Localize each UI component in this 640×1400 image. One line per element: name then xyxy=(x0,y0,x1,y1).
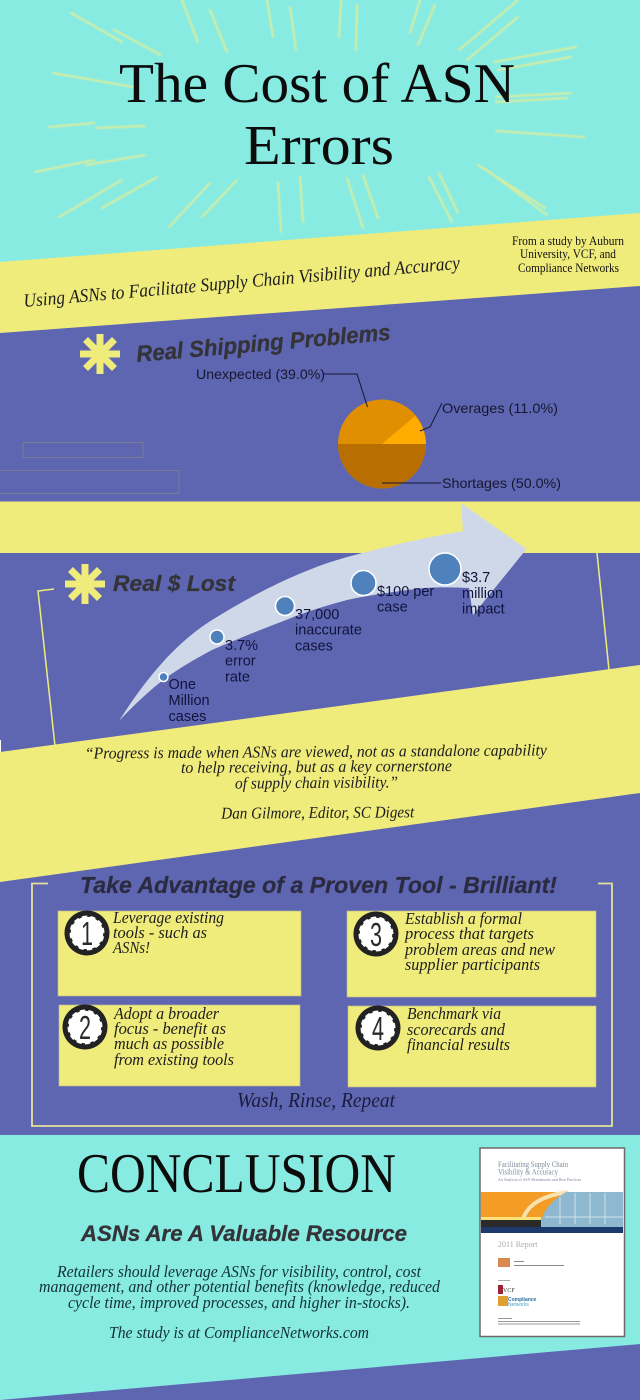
card 2 text: much as possible xyxy=(114,1034,224,1053)
icon: gear number 4 xyxy=(356,1006,400,1050)
card 3 xyxy=(347,909,596,997)
pie labels: Unexpected (39.0%) xyxy=(196,366,325,382)
card 4 text: Benchmark via xyxy=(407,1004,501,1023)
quote: Dan Gilmore, Editor, SC Digest xyxy=(220,802,415,823)
milestone labels: impact xyxy=(462,602,505,618)
icon: gear number 3: 3 xyxy=(370,916,382,953)
card 2 text: focus - benefit as xyxy=(114,1019,226,1038)
study link: The study is at ComplianceNetworks.com xyxy=(109,1323,369,1342)
leader lines xyxy=(324,374,442,483)
pie chart: shipping problems xyxy=(196,366,561,491)
milestone labels: One xyxy=(168,677,196,693)
conclusion paragraph: management, and other potential benefits (knowledge, reduced xyxy=(39,1277,441,1296)
cover logos xyxy=(498,1258,564,1308)
icon: gear number 1: 1 xyxy=(81,915,93,952)
conclusion paragraph: Retailers should leverage ASNs for visibility, control, cost xyxy=(56,1262,421,1281)
card 2 text: Adopt a broader xyxy=(113,1004,220,1023)
icon: gear number 4: 4 xyxy=(372,1010,384,1047)
arrow milestones xyxy=(159,553,461,682)
milestone labels xyxy=(168,570,505,725)
cover logos: VCF xyxy=(503,1288,515,1294)
icon: gear number 1 xyxy=(64,910,110,956)
card 1 text xyxy=(112,908,224,957)
study source note: Compliance Networks xyxy=(518,260,619,275)
quote: of supply chain visibility.” xyxy=(235,772,398,793)
milestone labels: 3.7% xyxy=(225,638,258,654)
quote: “Progress is made when ASNs are viewed, not as a standalone capability xyxy=(85,740,548,763)
study source note: From a study by Auburn xyxy=(512,233,624,248)
milestone labels: million xyxy=(462,586,503,602)
heading: real shipping problems: Real Shipping Problems xyxy=(135,319,391,367)
milestone labels: cases xyxy=(295,638,333,654)
milestone labels: inaccurate xyxy=(295,622,362,638)
progress arrow xyxy=(119,503,526,721)
empty outlined boxes xyxy=(0,442,179,494)
card 3 text: supplier participants xyxy=(405,955,540,974)
title xyxy=(119,53,515,177)
card 3 text xyxy=(404,909,555,974)
heading: take advantage: Take Advantage of a Proven Tool - Brilliant! xyxy=(80,872,557,898)
icon: asterisk dollars lost xyxy=(65,564,105,604)
milestone labels: Million xyxy=(168,693,210,709)
heading: real dollars lost: Real $ Lost xyxy=(113,571,237,596)
conclusion paragraph xyxy=(39,1262,441,1312)
milestone labels: cases xyxy=(168,709,206,725)
milestone labels: 37,000 xyxy=(295,607,339,623)
card 4 text: scorecards and xyxy=(407,1020,506,1039)
milestone labels: rate xyxy=(225,670,250,686)
icon: asterisk shipping problems xyxy=(80,334,120,374)
card 3 text: process that targets xyxy=(404,924,534,943)
cover year: 2011 Report xyxy=(498,1240,538,1249)
title: Errors xyxy=(244,115,394,177)
section bracket: real dollars lost xyxy=(38,553,609,746)
wash rinse repeat: Wash, Rinse, Repeat xyxy=(237,1088,396,1112)
sunburst rays xyxy=(35,0,584,232)
cover image band xyxy=(481,1192,623,1233)
icon: gear number 2 xyxy=(62,1004,108,1050)
cover fine print xyxy=(498,1318,580,1324)
pie labels: Shortages (50.0%) xyxy=(442,475,561,491)
pie labels: Overages (11.0%) xyxy=(442,400,558,416)
conclusion paragraph: cycle time, improved processes, and higher in-stocks). xyxy=(68,1293,410,1312)
subtitle: Using ASNs to Facilitate Supply Chain Visibility and Accuracy xyxy=(23,253,461,312)
section bracket: proven tool xyxy=(32,884,612,1126)
pie labels xyxy=(196,366,561,491)
card 1 xyxy=(58,908,301,996)
yellow banner: subtitle xyxy=(0,213,640,333)
milestone labels: error xyxy=(225,654,256,670)
card 2 text: from existing tools xyxy=(114,1050,234,1069)
study source note: University, VCF, and xyxy=(520,246,616,261)
cover logos: Networks xyxy=(508,1302,529,1308)
cover logos: Compliance xyxy=(508,1297,537,1303)
milestone labels: case xyxy=(377,600,408,616)
card 2 xyxy=(59,1004,300,1086)
quote: to help receiving, but as a key cornerstone xyxy=(181,756,452,777)
title: The Cost of ASN xyxy=(119,53,515,115)
quote xyxy=(85,740,548,824)
card 4 xyxy=(348,1004,596,1087)
yellow stripe behind arrow xyxy=(0,502,640,553)
card 1 text: tools - such as xyxy=(113,923,207,942)
card 3 text: Establish a formal xyxy=(404,909,522,928)
cover title: An Analysis of ASN Benchmarks and Best Practices xyxy=(498,1177,581,1182)
card 1 text: ASNs! xyxy=(112,938,150,957)
card 4 text: financial results xyxy=(407,1035,510,1054)
card 1 text: Leverage existing xyxy=(112,908,224,927)
report cover thumbnail xyxy=(480,1148,624,1336)
conclusion heading: CONCLUSION xyxy=(77,1143,396,1205)
study source note xyxy=(512,233,624,275)
cover title xyxy=(498,1159,581,1182)
subheading: valuable resource: ASNs Are A Valuable Resource xyxy=(80,1221,407,1246)
card 4 text xyxy=(407,1004,510,1054)
cover title: Facilitating Supply Chain xyxy=(498,1159,569,1169)
milestone labels: $3.7 xyxy=(462,570,490,586)
card 2 text xyxy=(113,1004,234,1069)
icon: gear number 3 xyxy=(354,912,398,956)
cover title: Visibility & Accuracy xyxy=(498,1166,559,1176)
milestone labels: $100 per xyxy=(377,584,434,600)
bottom purple wedge xyxy=(0,1344,640,1400)
card 3 text: problem areas and new xyxy=(404,940,555,959)
icon: gear number 2: 2 xyxy=(79,1009,91,1046)
yellow quote band xyxy=(0,665,640,882)
